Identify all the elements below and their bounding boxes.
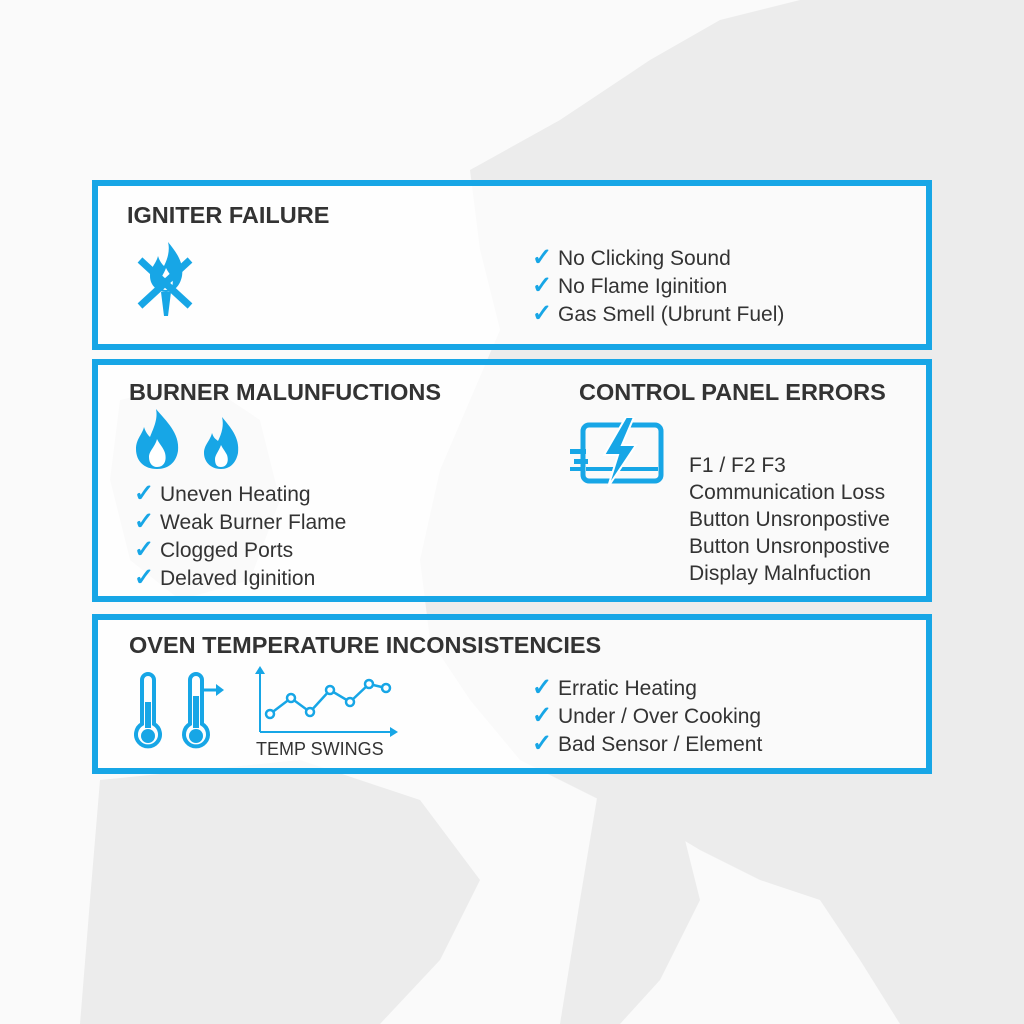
list: oven symptoms: ✓	[532, 674, 552, 701]
panel: igniter failure	[92, 180, 932, 350]
list: oven symptoms: ✓	[532, 702, 552, 729]
panel: burner and control	[92, 359, 932, 602]
list: control errors: Communication Loss	[689, 481, 885, 504]
icon: thermometers	[134, 672, 224, 748]
chart: temp swings	[255, 666, 398, 737]
list: control errors: F1 / F2 F3	[689, 454, 786, 477]
list: burner symptoms: Weak Burner Flame	[160, 511, 346, 534]
list: oven symptoms: Erratic Heating	[558, 677, 697, 700]
list: igniter symptoms: No Clicking Sound	[558, 247, 731, 270]
heading: igniter failure: IGNITER FAILURE	[127, 202, 329, 228]
list: burner symptoms: ✓	[134, 536, 154, 563]
heading: oven temperature: OVEN TEMPERATURE INCONSISTENCIES	[129, 632, 601, 658]
list: control errors: Button Unsronpostive	[689, 535, 890, 558]
list: oven symptoms: ✓	[532, 730, 552, 757]
list: igniter symptoms: ✓	[532, 300, 552, 327]
list: igniter symptoms: ✓	[532, 272, 552, 299]
list: control errors: Display Malnfuction	[689, 562, 871, 585]
heading: burner malfunctions: BURNER MALUNFUCTIONS	[129, 379, 441, 405]
list: oven symptoms: Bad Sensor / Element	[558, 733, 762, 756]
list: burner symptoms: Uneven Heating	[160, 483, 311, 506]
list: igniter symptoms	[532, 244, 784, 327]
icon: flames	[136, 409, 238, 469]
list: burner symptoms: ✓	[134, 508, 154, 535]
panel: oven temperature	[92, 614, 932, 774]
list: igniter symptoms: ✓	[532, 244, 552, 271]
list: igniter symptoms: No Flame Iginition	[558, 275, 727, 298]
list: burner symptoms	[134, 480, 346, 591]
heading: control panel errors: CONTROL PANEL ERRORS	[579, 379, 886, 405]
list: oven symptoms	[532, 674, 762, 757]
list: burner symptoms: Clogged Ports	[160, 539, 293, 562]
label: temp swings: TEMP SWINGS	[256, 739, 384, 759]
list: oven symptoms: Under / Over Cooking	[558, 705, 761, 728]
list: control errors	[689, 454, 890, 585]
list: burner symptoms: Delaved Iginition	[160, 567, 315, 590]
list: control errors: Button Unsronpostive	[689, 508, 890, 531]
list: burner symptoms: ✓	[134, 564, 154, 591]
icon: control panel bolt	[570, 418, 664, 484]
list: burner symptoms: ✓	[134, 480, 154, 507]
icon: crossed flame	[138, 242, 192, 316]
list: igniter symptoms: Gas Smell (Ubrunt Fuel)	[558, 303, 784, 326]
